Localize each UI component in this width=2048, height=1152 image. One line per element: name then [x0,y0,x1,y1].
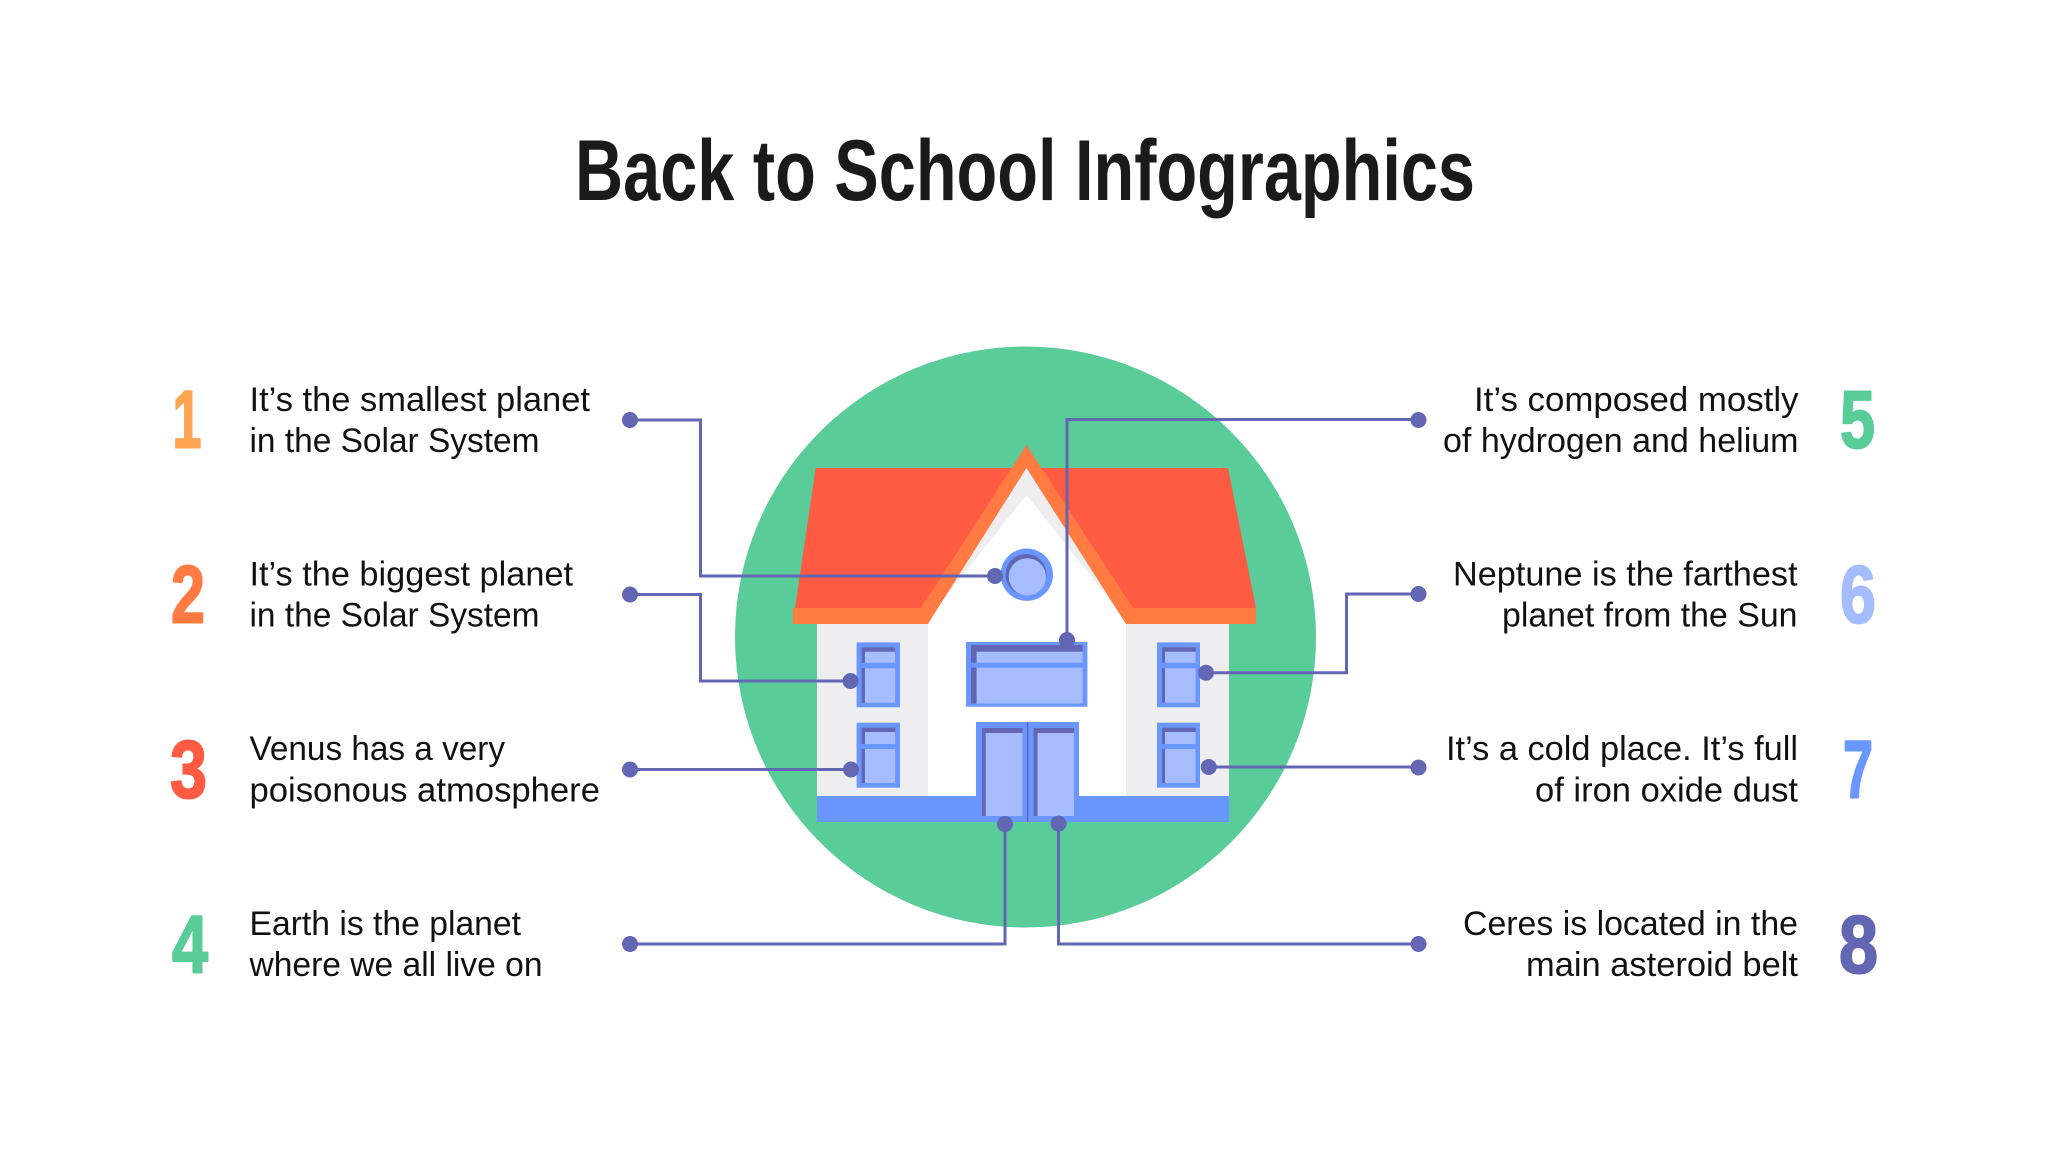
white front wall [928,495,1126,796]
number 7: 7 [1843,724,1873,816]
text 5: It’s composed mostly [1474,381,1798,419]
text 4: Earth is the planet [250,905,522,943]
number 2: 2 [171,550,205,640]
item 5 [1059,374,1875,648]
number 4: 4 [172,900,208,990]
text 8: Ceres is located in the [1463,905,1798,943]
connector 3 [622,762,859,778]
orange roof trim [793,445,1256,624]
text 1: in the Solar System [250,422,540,460]
text 2: It’s the biggest planet [250,556,574,594]
connector 6 [1198,586,1426,681]
text 7: It’s a cold place. It’s full [1446,730,1798,768]
number 8: 8 [1839,900,1878,990]
text 7: of iron oxide dust [1535,772,1799,810]
text 4: where we all live on [249,946,542,984]
text 6: Neptune is the farthest [1453,556,1798,594]
red roof [795,468,1256,608]
item 6 [1198,550,1876,681]
item 7 [1201,724,1873,816]
blue base [817,796,1229,822]
text 5: of hydrogen and helium [1443,422,1798,460]
item 4 [172,816,1013,990]
item 3 [170,724,859,816]
gable shadow [928,468,1126,796]
round window [1001,548,1053,601]
connector 2 [622,586,858,689]
connector 7 [1201,759,1426,776]
text 1: It’s the smallest planet [250,381,591,419]
window: upper right [1157,642,1200,707]
number 6: 6 [1840,550,1876,640]
text 3: Venus has a very [250,730,505,768]
text 6: planet from the Sun [1502,597,1798,635]
number 3: 3 [170,724,207,816]
item 8 [1050,816,1878,990]
text 2: in the Solar System [250,597,540,635]
window: centre [966,642,1087,707]
connector 1 [622,412,1003,584]
connector 8 [1050,816,1426,952]
text 8: main asteroid belt [1526,946,1799,984]
window: upper left [857,642,900,707]
title: Back to School Infographics [575,123,1475,219]
illustration: school building on green circle [735,346,1316,928]
number 1: 1 [172,374,202,466]
window: lower right [1157,723,1200,788]
item 2 [171,550,858,689]
double door [976,722,1079,822]
item 1 [172,374,1003,584]
side walls [817,624,1229,796]
window: lower left [857,723,900,788]
green circle [735,346,1316,928]
connector 4 [622,816,1013,952]
number 5: 5 [1840,374,1875,466]
text 3: poisonous atmosphere [250,772,600,810]
connector 5 [1059,412,1426,648]
